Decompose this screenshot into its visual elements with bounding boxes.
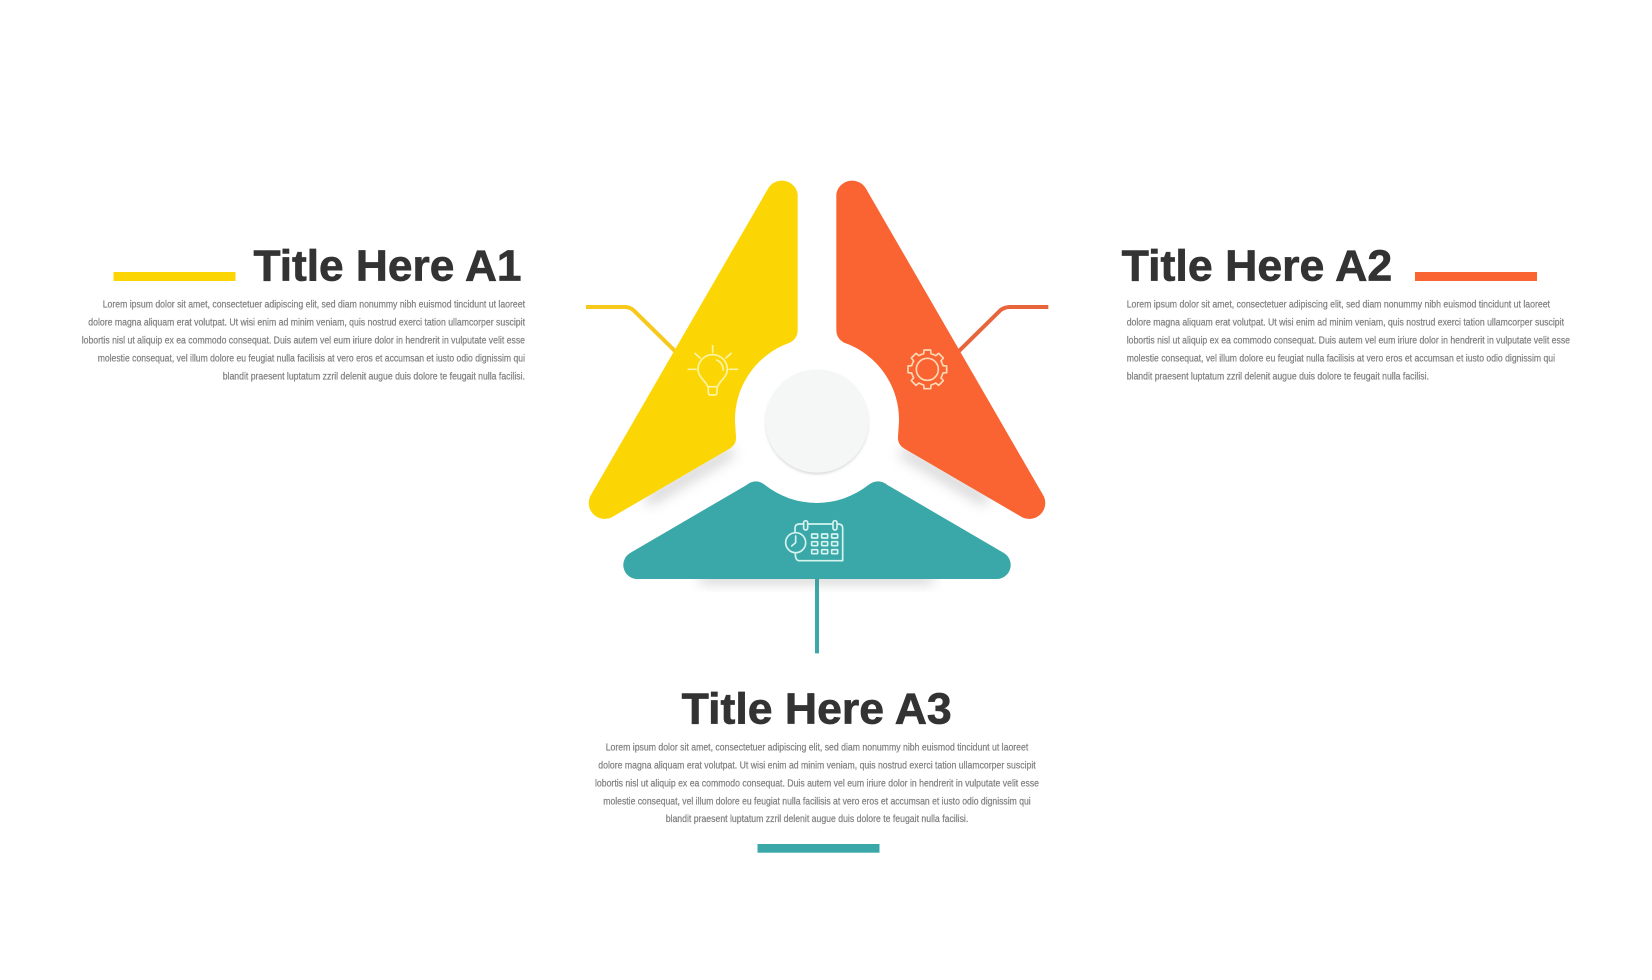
body: A1: Lorem ipsum dolor sit amet, consectetuer adipiscing elit, sed diam nonummy nibh euismod tincidunt ut laoreet bbox=[103, 300, 525, 310]
heading: A3: Title Here A3 bbox=[682, 684, 952, 734]
heading: A1: Title Here A1 bbox=[254, 242, 522, 290]
connector: orange bbox=[957, 307, 1048, 353]
icon: gear bbox=[908, 350, 947, 389]
body: A1: dolore magna aliquam erat volutpat. Ut wisi enim ad minim veniam, quis nostrud exerci tation ullamcorper suscipit bbox=[88, 318, 525, 328]
heading: A2: Title Here A2 bbox=[1122, 242, 1392, 290]
accent bar: orange bbox=[1415, 272, 1537, 281]
body: A3 bbox=[595, 742, 1039, 825]
segment: teal bbox=[623, 481, 1011, 579]
accent bar: teal bbox=[758, 844, 880, 853]
body: A3: blandit praesent luptatum zzril delenit augue duis dolore te feugait nulla facilisi. bbox=[666, 814, 968, 825]
segment: orange bbox=[836, 181, 1045, 519]
text block: A2 bbox=[1122, 242, 1570, 382]
body: A1: molestie consequat, vel illum dolore eu feugiat nulla facilisis at vero eros et accumsan et iusto odio dignissim qui bbox=[98, 354, 525, 364]
body: A2: Lorem ipsum dolor sit amet, consectetuer adipiscing elit, sed diam nonummy nibh euismod tincidunt ut laoreet bbox=[1127, 300, 1550, 310]
body: A2: blandit praesent luptatum zzril delenit augue duis dolore te feugait nulla facilisi. bbox=[1127, 372, 1429, 382]
connector: teal bbox=[811, 577, 823, 653]
body: A3: dolore magna aliquam erat volutpat. Ut wisi enim ad minim veniam, quis nostrud exerci tation ullamcorper suscipit bbox=[598, 760, 1036, 772]
body: A2: molestie consequat, vel illum dolore eu feugiat nulla facilisis at vero eros et accumsan et iusto odio dignissim qui bbox=[1127, 354, 1555, 364]
body: A2: lobortis nisl ut aliquip ex ea commodo consequat. Duis autem vel eum iriure dolor in hendrerit in vulputate velit esse bbox=[1127, 336, 1570, 346]
text block: A3 bbox=[595, 684, 1039, 853]
shadow: yellow segment bbox=[643, 447, 735, 505]
body: A1 bbox=[82, 300, 525, 382]
body: A1: blandit praesent luptatum zzril delenit augue duis dolore te feugait nulla facilisi. bbox=[223, 372, 525, 382]
icon: light bulb bbox=[688, 346, 738, 395]
body: A1: lobortis nisl ut aliquip ex ea commodo consequat. Duis autem vel eum iriure dolor in hendrerit in vulputate velit esse bbox=[82, 336, 525, 346]
icon: calendar with clock bbox=[786, 521, 843, 561]
accent bar: yellow bbox=[114, 272, 236, 281]
body: A3: Lorem ipsum dolor sit amet, consectetuer adipiscing elit, sed diam nonummy nibh euismod tincidunt ut laoreet bbox=[606, 742, 1028, 754]
text block: A1 bbox=[82, 242, 525, 382]
body: A2 bbox=[1127, 300, 1570, 382]
body: A3: lobortis nisl ut aliquip ex ea commodo consequat. Duis autem vel eum iriure dolor in hendrerit in vulputate velit esse bbox=[595, 778, 1039, 790]
center circle shadow bbox=[766, 372, 868, 474]
body: A3: molestie consequat, vel illum dolore eu feugiat nulla facilisis at vero eros et accumsan et iusto odio dignissim qui bbox=[603, 796, 1031, 808]
connector: yellow bbox=[586, 307, 677, 353]
body: A2: dolore magna aliquam erat volutpat. Ut wisi enim ad minim veniam, quis nostrud exerci tation ullamcorper suscipit bbox=[1127, 318, 1564, 328]
shadow: teal segment bbox=[700, 573, 933, 583]
center circle bbox=[765, 369, 869, 473]
panel: central diagram bbox=[586, 181, 1048, 653]
segment: yellow bbox=[589, 181, 798, 519]
shadow: orange segment bbox=[899, 447, 991, 505]
